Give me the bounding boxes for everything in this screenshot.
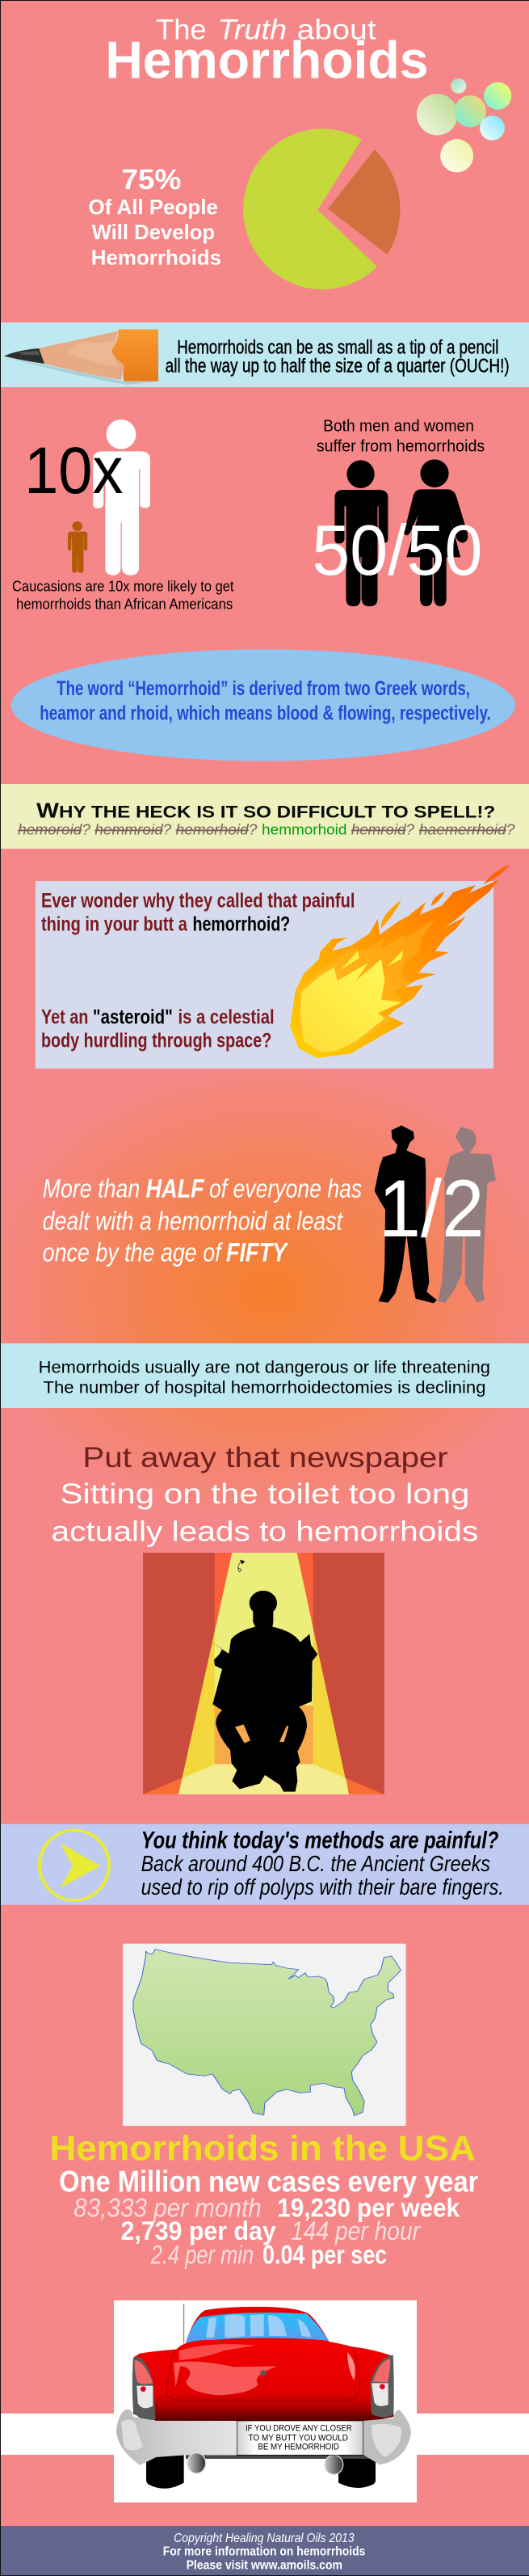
map of the USA (123, 1944, 406, 2126)
left tail light (132, 2357, 156, 2420)
panel: 10x comparison (12, 419, 234, 613)
stat: 75 percent text: Will Develop (92, 221, 215, 244)
half text: dealt with a hemorrhoid at least (43, 1207, 343, 1236)
bumper sticker (237, 2421, 363, 2455)
stats: hemorrhoids in the USA: 2.4 per min (150, 2241, 254, 2270)
icon: small brown person (68, 521, 87, 573)
icon: yellow arrow circle (40, 1830, 109, 1900)
car body (133, 2340, 393, 2421)
spelling variants: hemmroid? (94, 822, 171, 838)
10x label: 10x (24, 433, 123, 508)
caption: men and women: Both men and women (323, 416, 474, 435)
panel: not dangerous band (0, 1343, 529, 1408)
heading: newspaper (51, 1442, 478, 1548)
silhouette: man reading newspaper (207, 1603, 317, 1792)
heading: newspaper: Put away that newspaper (82, 1442, 448, 1474)
stats: hemorrhoids in the USA (49, 2130, 478, 2270)
stats: hemorrhoids in the USA: 144 per hour (291, 2216, 422, 2245)
title: The (156, 14, 207, 45)
spelling variants: hemroid? (351, 822, 414, 838)
stats: hemorrhoids in the USA: 83,333 per month (73, 2194, 262, 2223)
stats: hemorrhoids in the USA: 0.04 per sec (262, 2241, 387, 2270)
caption: Caucasians (12, 579, 234, 613)
stat: 75 percent text: Hemorrhoids (91, 247, 221, 270)
icon: fly (237, 1560, 245, 1572)
asteroid question text: Yet an (41, 1006, 88, 1028)
half text: FIFTY (226, 1238, 288, 1267)
stats: hemorrhoids in the USA: 2,739 per day (121, 2216, 276, 2245)
asteroid question text: "asteroid" (93, 1006, 173, 1028)
icon: pencil (4, 329, 159, 385)
title: about (297, 14, 376, 45)
icon: flaming asteroid (290, 865, 510, 1058)
callout: word origin ellipse (11, 649, 515, 761)
panel: half of everyone (43, 1125, 496, 1303)
spelling variants: hemoroid? (18, 822, 90, 838)
trunk lock (260, 2370, 267, 2376)
asteroid question text: Ever wonder why they called that painful (41, 890, 355, 912)
bubbles decoration (417, 78, 511, 172)
caption: men and women: suffer from hemorrhoids (317, 436, 485, 455)
stat: 75 percent text (88, 162, 221, 270)
icon: woman (404, 459, 468, 606)
stat: 75 percent text: Of All People (88, 196, 218, 219)
spelling heading: WHY THE HECK IS IT SO DIFFICULT TO SPELL!? (36, 799, 495, 823)
asteroid question text: thing in your butt a (41, 913, 187, 935)
asteroid question text: is a celestial (178, 1006, 275, 1028)
panel: spelling band (0, 784, 529, 849)
icon: large white person (93, 419, 150, 575)
bumper sticker: IF YOU DROVE ANY CLOSER (246, 2424, 352, 2434)
illustration: man on toilet (143, 1553, 384, 1794)
half text: More than (43, 1174, 140, 1204)
panel: pencil tip fact (0, 323, 529, 387)
illustration: red car with bumper sticker (114, 2300, 417, 2502)
Greeks text (141, 1828, 504, 1899)
bumper sticker: TO MY BUTT YOU WOULD (249, 2433, 348, 2443)
exhaust pipes (187, 2453, 343, 2474)
icon: grey silhouette (438, 1127, 496, 1303)
spelling variants (18, 822, 515, 838)
footer: Please visit www.amoils.com (187, 2558, 342, 2572)
1/2 label: 1/2 (379, 1163, 484, 1254)
half text: once by the age of (43, 1238, 224, 1267)
white band behind car (0, 2414, 529, 2455)
pencil text (166, 335, 510, 377)
title: Hemorrhoids (105, 31, 429, 90)
half text (43, 1174, 362, 1267)
asteroid question text: hemorrhoid? (193, 913, 290, 935)
spelling variants: hemorhoid? (176, 822, 258, 838)
panel: ancient Greeks (0, 1824, 529, 1905)
half text: of everyone has (209, 1174, 362, 1204)
pie chart (243, 129, 401, 289)
spelling variants: hemmorhoid (262, 822, 346, 838)
chrome bumper (116, 2409, 411, 2465)
panel: men and women 50/50 (312, 416, 485, 606)
stats: hemorrhoids in the USA: 19,230 per week (277, 2194, 460, 2223)
footer: For more information on hemorrhoids (163, 2544, 365, 2558)
icon: man (334, 460, 388, 606)
footer (0, 2526, 529, 2576)
right tail light (370, 2355, 394, 2418)
icon: black silhouette (375, 1125, 437, 1303)
bumper sticker: BE MY HEMORRHOID (258, 2443, 339, 2452)
caption: men and women (317, 416, 485, 455)
title: Truth (217, 14, 287, 45)
car wheels (146, 2455, 376, 2489)
caption: Caucasians: Caucasions are 10x more likely to get (12, 579, 234, 595)
panel: asteroid (36, 865, 510, 1069)
spelling variants: haemerrhoid? (419, 822, 515, 838)
heading: newspaper: Sitting on the toilet too long (60, 1478, 469, 1510)
orange radial glow background (0, 1059, 529, 1528)
stat: 75 percent text: 75% (121, 162, 181, 196)
asteroid question text (41, 890, 355, 1052)
footer: Copyright Healing Natural Oils 2013 (174, 2531, 355, 2545)
title (105, 14, 429, 90)
man head (250, 1591, 277, 1616)
car roof and window (186, 2307, 329, 2342)
heading: newspaper: actually leads to hemorrhoids (51, 1516, 478, 1548)
caption: Caucasians: hemorrhoids than African Americans (16, 596, 233, 613)
half text: HALF (145, 1174, 204, 1204)
asteroid question text: body hurdling through space? (41, 1030, 271, 1052)
